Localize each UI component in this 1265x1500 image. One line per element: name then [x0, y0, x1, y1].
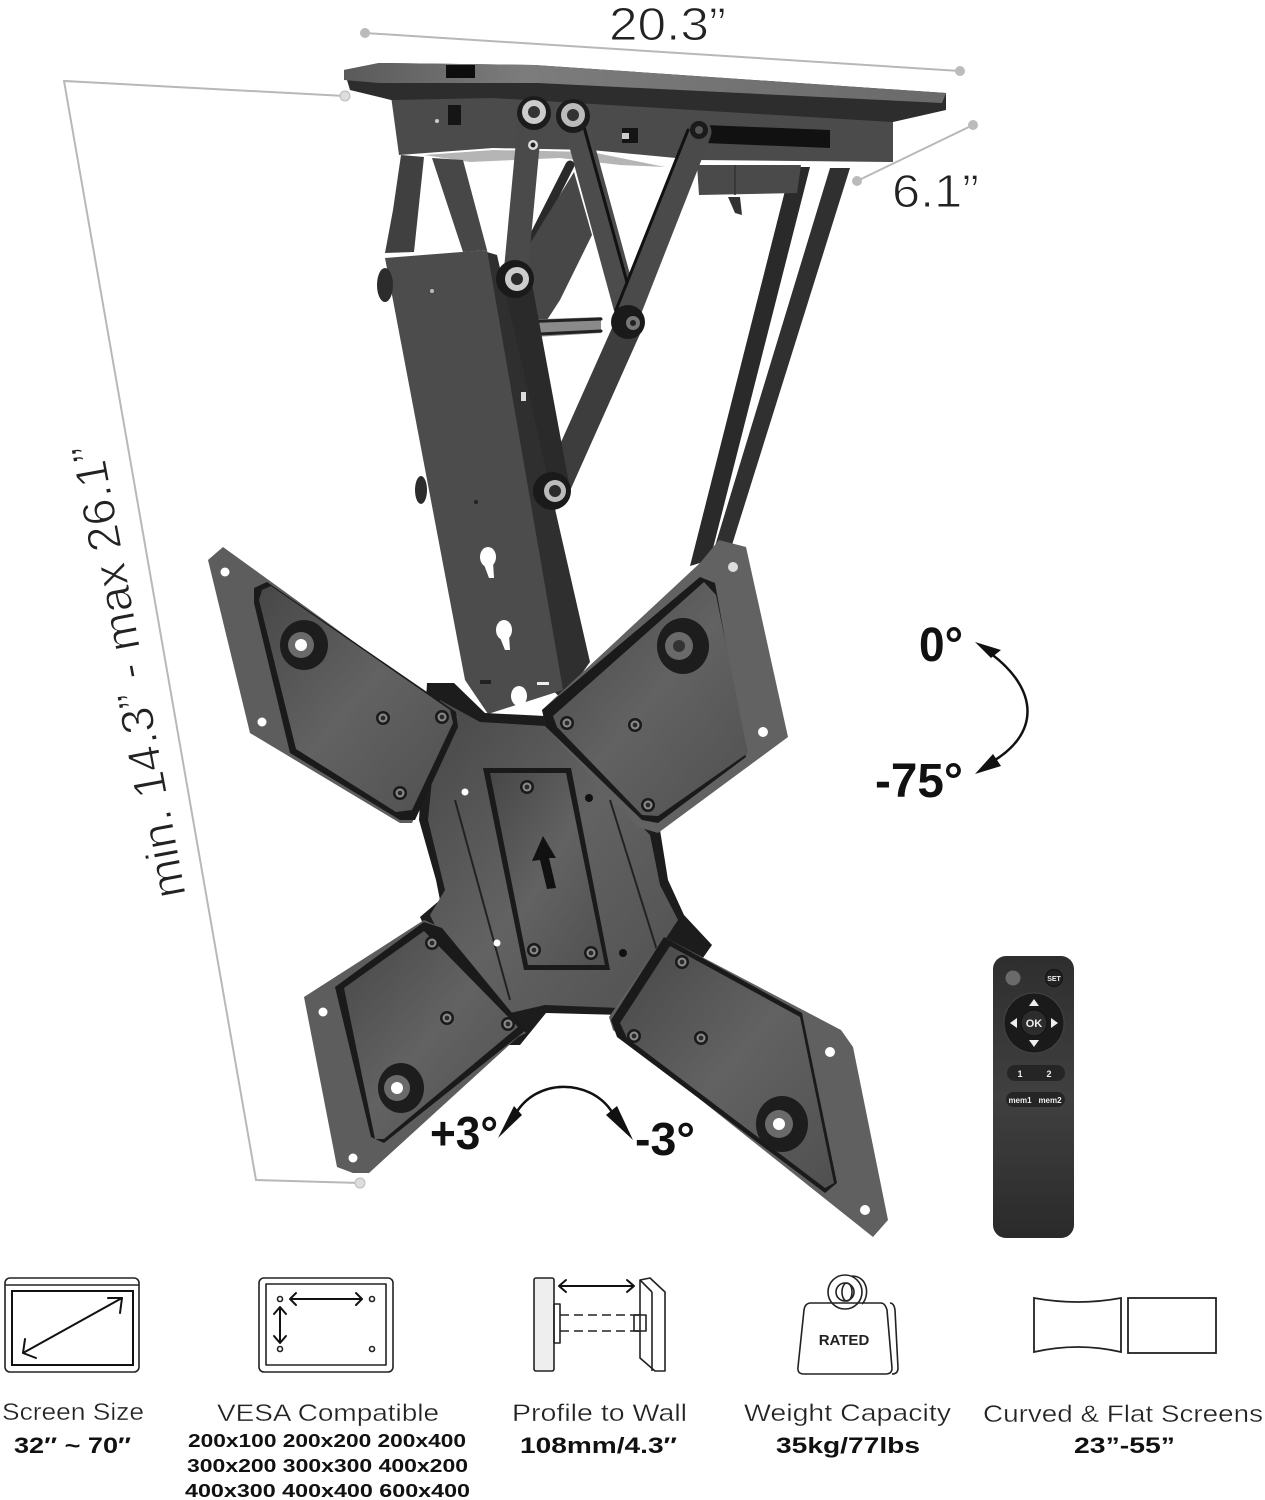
label: Weight Capacity — [744, 1400, 951, 1427]
label: VESA Compatible — [217, 1400, 439, 1427]
housing box — [391, 94, 893, 167]
remote control: mem1 — [1008, 1096, 1032, 1105]
remote control: SET — [1047, 976, 1062, 983]
icon: VESA pattern — [259, 1278, 393, 1372]
callout: swivel plus or minus 3 degrees: -3° — [635, 1113, 695, 1165]
value: 32″ ~ 70″ — [14, 1433, 132, 1458]
callout: tilt 0 to -75 degrees: 0° — [919, 619, 963, 672]
label: Profile to Wall — [512, 1400, 687, 1427]
feature: profile to wall — [512, 1278, 687, 1458]
plate: top right — [542, 540, 788, 833]
callout: swivel plus or minus 3 degrees — [430, 1087, 695, 1165]
column — [385, 250, 590, 716]
callout: tilt 0 to -75 degrees — [875, 619, 1028, 808]
icon: rated weight — [798, 1275, 898, 1374]
feature: screen size — [2, 1278, 144, 1458]
plate: bottom left — [304, 920, 526, 1173]
label: Curved & Flat Screens — [983, 1401, 1263, 1428]
rollers — [377, 96, 708, 510]
remote control — [993, 956, 1074, 1238]
remote control: mem2 — [1038, 1096, 1062, 1105]
dimension: width 20.3 inches — [360, 0, 965, 76]
ceiling plate — [344, 63, 946, 122]
icon: rated weight: RATED — [819, 1332, 869, 1349]
value: 108mm/4.3″ — [520, 1433, 678, 1458]
feature: curved and flat screens — [983, 1298, 1263, 1458]
motor box — [697, 165, 801, 215]
supported patterns: 300x200 300x300 400x200 — [187, 1456, 468, 1476]
callout: swivel plus or minus 3 degrees: +3° — [430, 1107, 498, 1159]
icon: curved and flat screen — [1034, 1298, 1216, 1353]
supported patterns: 200x100 200x200 200x400 — [188, 1431, 466, 1451]
feature: weight capacity — [744, 1275, 951, 1458]
plate: bottom right — [609, 937, 888, 1237]
dimension: height min 14.3 max 26.1 inches — [61, 81, 360, 1183]
value: 35kg/77lbs — [776, 1433, 920, 1458]
upper links — [515, 120, 699, 322]
plate: top left — [208, 547, 458, 823]
dimension: height min 14.3 max 26.1 inches: min. 14.3” - max 26.1” — [61, 441, 196, 903]
mount: motorized ceiling bracket — [208, 63, 946, 1237]
center body — [419, 683, 712, 1045]
icon: screen diagonal — [5, 1278, 139, 1372]
scissor links behind — [516, 165, 630, 490]
feature: VESA compatible — [185, 1278, 470, 1500]
dimension end dots — [340, 91, 862, 1188]
remote control: 1 — [1017, 1069, 1023, 1079]
remote control: OK — [1026, 1018, 1042, 1030]
supported patterns — [185, 1431, 470, 1500]
callout: tilt 0 to -75 degrees: -75° — [875, 755, 963, 808]
remote control: 2 — [1046, 1069, 1052, 1079]
dimension: depth 6.1 inches — [857, 120, 979, 217]
dimension: depth 6.1 inches: 6.1” — [892, 165, 979, 217]
icon: wall profile — [534, 1278, 665, 1371]
struts — [385, 155, 487, 253]
value: 23”-55” — [1074, 1433, 1175, 1458]
icon: up arrow — [532, 836, 556, 889]
straps — [690, 167, 850, 566]
label: Screen Size — [2, 1399, 144, 1426]
